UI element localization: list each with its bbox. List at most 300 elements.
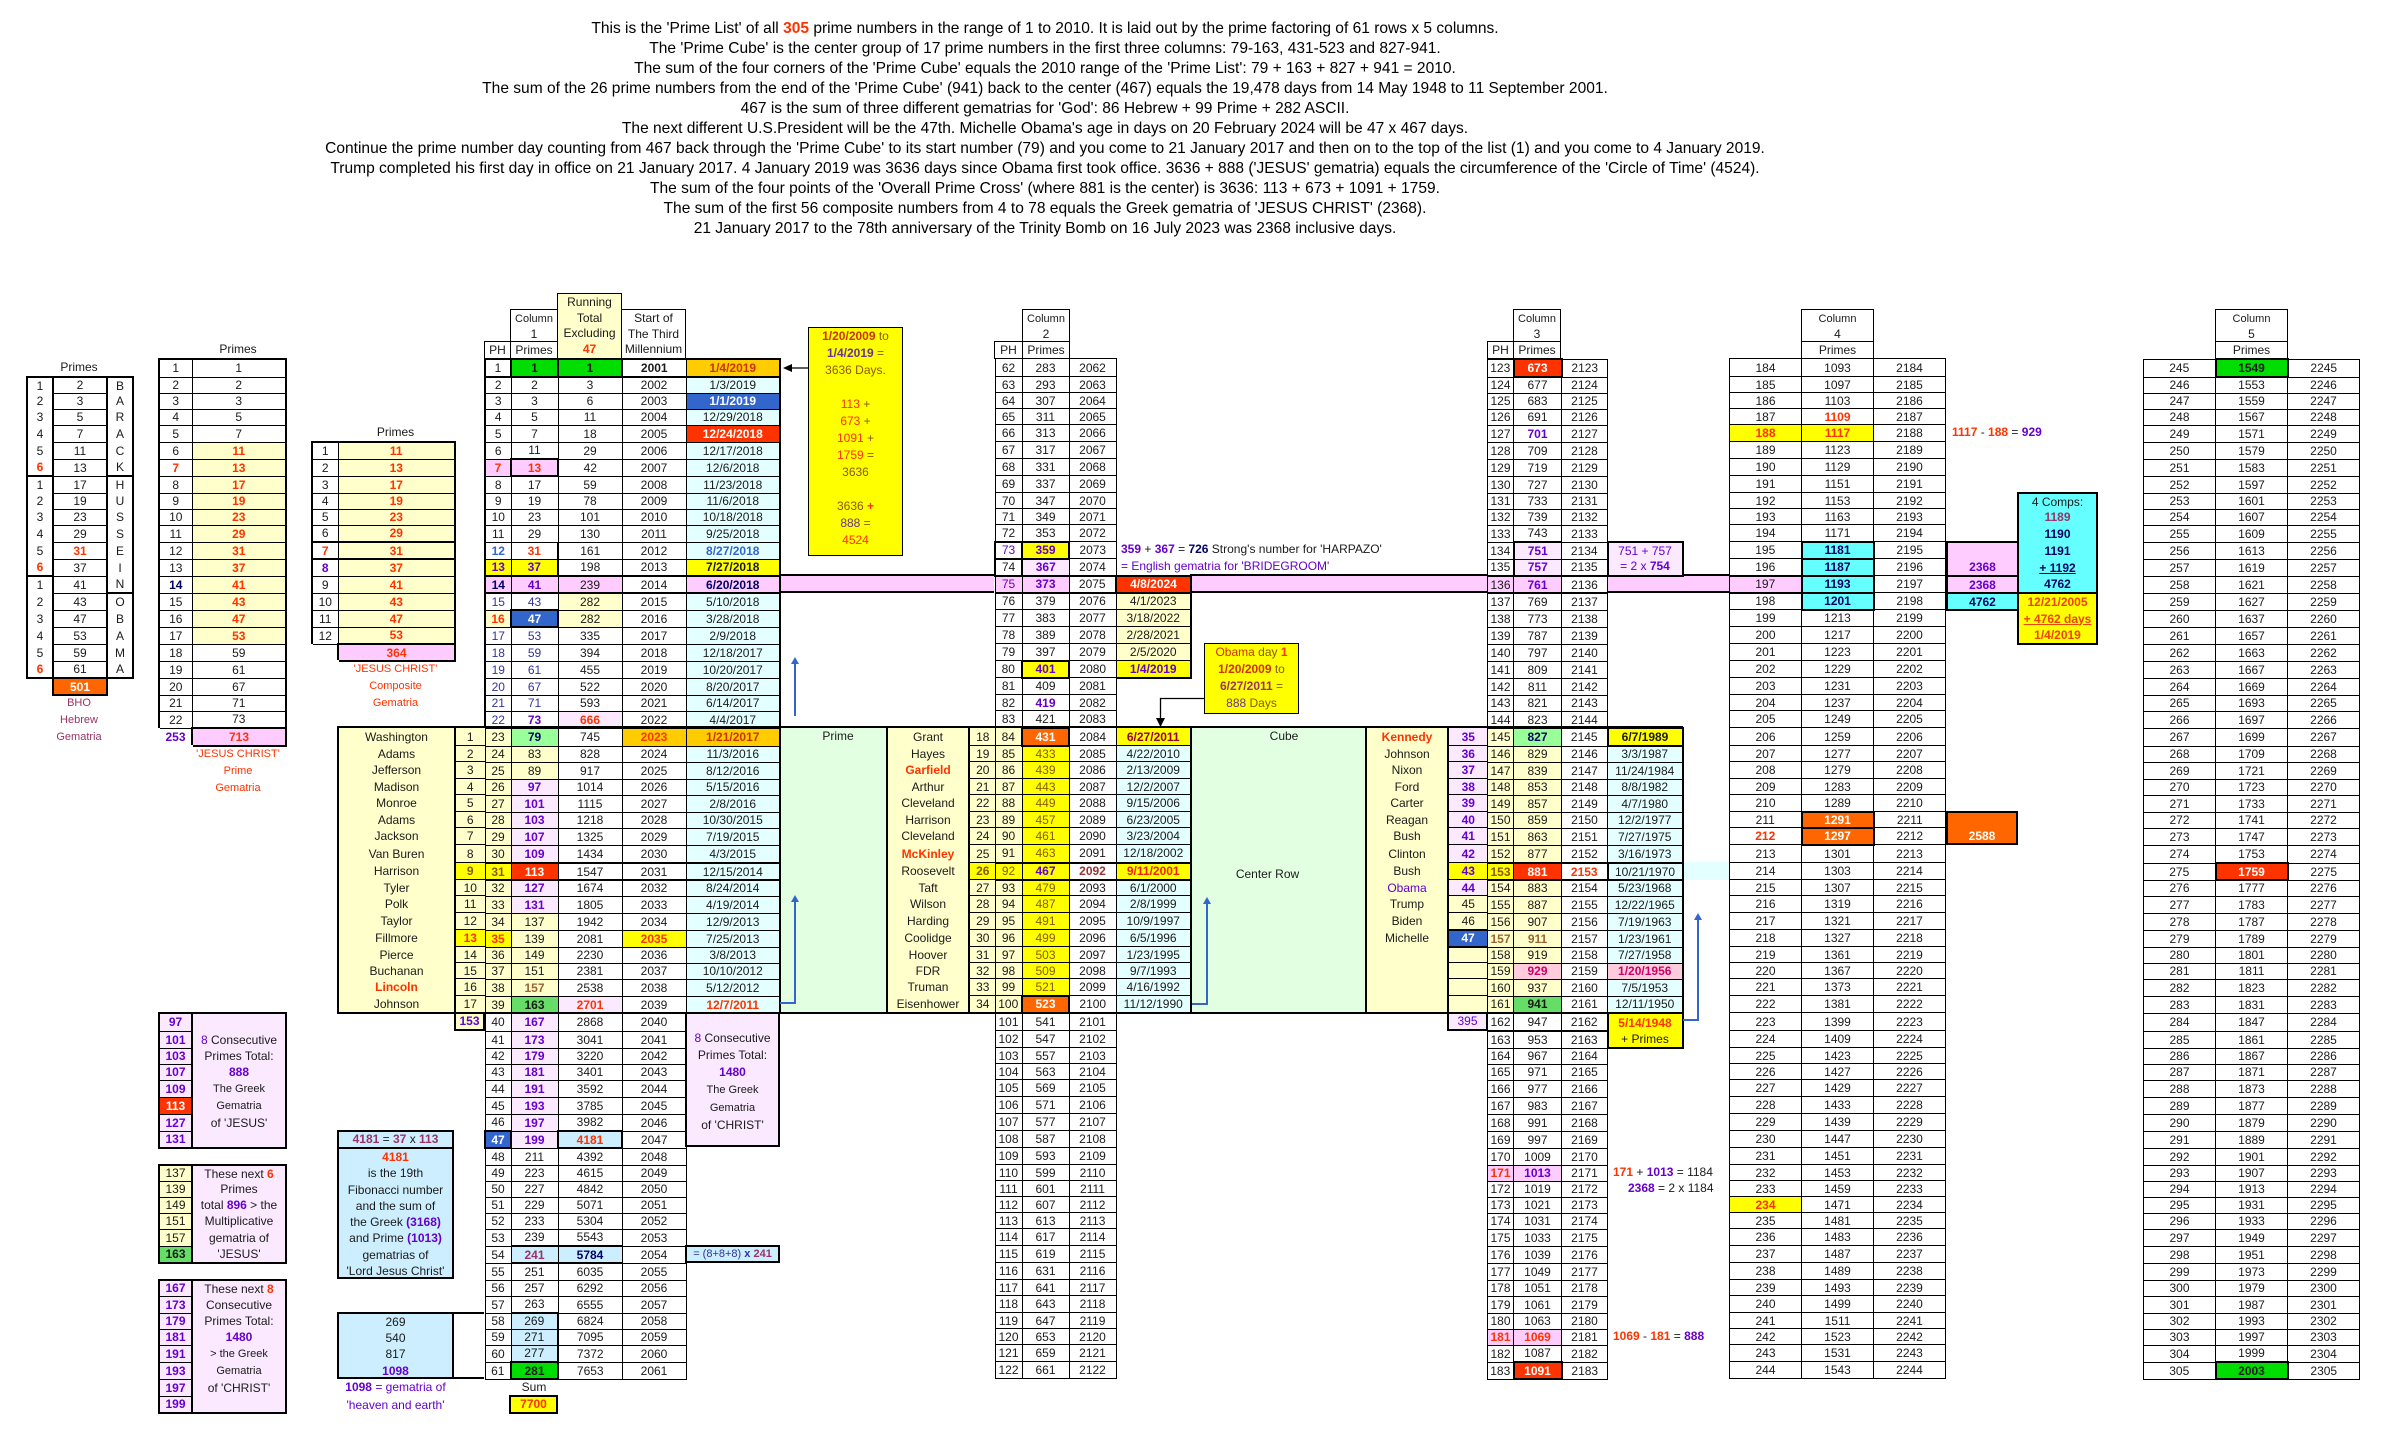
table: column 4 primes: 1499	[1824, 1297, 1851, 1311]
table: column 3 primes and dates: 7/19/1963	[1618, 914, 1671, 928]
table: column 1 primes running total and dates: 2018	[641, 646, 667, 660]
table: column 2 primes and dates: 2111	[1080, 1182, 1105, 1196]
table: column 4 primes: 227	[1755, 1081, 1776, 1095]
table: BHO letters and primes: 47	[73, 612, 87, 626]
table: column 3 primes and dates: 6/7/1989	[1622, 730, 1668, 744]
heading: primes: Primes	[377, 425, 414, 439]
header: primes: Primes	[1518, 343, 1556, 357]
arrow: down to 6/27/2011	[1156, 698, 1204, 726]
table: column 5 primes: 1867	[2238, 1049, 2265, 1063]
table: column 3 primes and dates: 2137	[1571, 595, 1598, 609]
table: column 1 primes running total and dates: 54	[491, 1248, 505, 1262]
panel: president names block 1: Madison	[374, 780, 419, 794]
table: column 4 primes: 1153	[1825, 494, 1850, 508]
table: column 4 primes: 2204	[1896, 696, 1923, 710]
table: twelve primes: 5	[322, 510, 329, 524]
table: column 3 primes and dates: 683	[1527, 394, 1548, 408]
table: column 3 primes and dates: 983	[1527, 1098, 1548, 1112]
table: column 1 primes running total and dates: 5071	[577, 1198, 603, 1212]
table: column 1 primes running total and dates: 49	[491, 1166, 505, 1180]
table: column 5 primes: 263	[2169, 662, 2190, 676]
panel: president names block 3: 41	[1462, 829, 1475, 843]
table: column 5 primes: 2278	[2310, 914, 2337, 928]
table: column 4 primes: 1427	[1824, 1064, 1851, 1078]
table: column 4 primes: 2206	[1896, 730, 1923, 744]
table: column 1 primes running total and dates: 39	[491, 998, 505, 1012]
table: column 5 primes: 2293	[2310, 1166, 2337, 1180]
table: column 2 primes and dates: 68	[1002, 460, 1015, 474]
table: column 2 primes and dates: 479	[1035, 881, 1056, 895]
table: column 3 primes and dates: 131	[1490, 494, 1511, 508]
table: column 3 primes and dates: 1019	[1524, 1182, 1551, 1196]
table: column 2 primes and dates: 2104	[1079, 1064, 1106, 1078]
panel: president names block 2: McKinley	[902, 846, 954, 860]
table: column 3 primes and dates: 1/20/1956	[1618, 964, 1671, 978]
table: column 3 primes and dates: 141	[1490, 662, 1511, 676]
table: column 5 primes: 2250	[2310, 444, 2337, 458]
panel: 4181 Fibonacci note: Fibonacci number	[348, 1183, 443, 1197]
table: column 4 primes: 232	[1755, 1166, 1776, 1180]
table: BHO letters and primes: 6	[37, 662, 43, 676]
table: column 2 primes and dates: 113	[999, 1214, 1018, 1228]
table: column 3 primes and dates: 757	[1528, 560, 1548, 574]
table: column 4 primes: 200	[1755, 628, 1776, 642]
panel: 4 composites: + 4762 days	[2024, 612, 2091, 626]
table: column 1 primes running total and dates: 8/24/2014	[706, 881, 759, 895]
table: column 2 primes and dates: 547	[1035, 1032, 1056, 1046]
table: column 1 primes running total and dates: 1/1/2019	[709, 394, 756, 408]
panel: president names block 2: 33	[976, 980, 989, 994]
table: column 4 primes: 228	[1755, 1098, 1776, 1112]
table: column 1 primes running total and dates: 233	[524, 1214, 545, 1228]
table: column 5 primes: 2267	[2310, 730, 2337, 744]
panel: president names block 3: 47	[1461, 931, 1475, 945]
table: column 1 primes running total and dates: 277	[524, 1346, 544, 1360]
table: BHO letters and primes: 61	[73, 662, 87, 676]
panel: president names block 1: 6	[467, 812, 474, 826]
table: column 4 primes: 220	[1755, 964, 1776, 978]
table: column 3 primes and dates: 138	[1490, 612, 1511, 626]
table: column 3 primes and dates: 991	[1527, 1116, 1548, 1130]
table: column 3 primes and dates: 7/27/1975	[1618, 830, 1671, 844]
table: column 5 primes: 1657	[2238, 628, 2265, 642]
title: intro text block: The sum of the 26 prime numbers from the end of the 'Prime Cube' (941) back to the center (467) equals the 19,478 days from 14 May 1948 to 11 September 2001.	[482, 80, 1608, 97]
panel: president names block 1: 14	[464, 948, 477, 962]
panel: president names block 1: 5	[467, 796, 474, 810]
table: column 4 primes: 1471	[1824, 1198, 1851, 1212]
table: column 4 primes: 1459	[1824, 1182, 1851, 1196]
table: column 2 primes and dates: 439	[1035, 763, 1056, 777]
header: PH	[1487, 341, 1514, 359]
panel: president names block 2: Taft	[918, 880, 938, 894]
table: column 2 primes and dates: 95	[1002, 914, 1015, 928]
table: BHO letters and primes: 1	[37, 478, 43, 492]
table: column 1 primes running total and dates: 7	[495, 460, 501, 474]
table: column 4 primes: 2234	[1896, 1198, 1923, 1212]
table: column 1 primes running total and dates: 130	[580, 526, 600, 540]
table: column 1 primes running total and dates: 45	[491, 1098, 505, 1112]
table: column 2 primes and dates: 93	[1002, 881, 1015, 895]
table: column 3 primes and dates: 2143	[1571, 696, 1598, 710]
table: column 2 primes and dates: 389	[1035, 628, 1056, 642]
table: first 22 primes: 1	[235, 361, 242, 375]
table: column 3 primes and dates: 677	[1527, 378, 1548, 392]
table: column 4 primes: 2237	[1896, 1247, 1923, 1261]
table: column 2 primes and dates: 6/27/2011	[1127, 730, 1180, 744]
table: column 5 primes: 1847	[2238, 1015, 2265, 1029]
table: column 3 primes and dates: 156	[1490, 914, 1511, 928]
table: column 1 primes running total and dates: 31	[528, 544, 541, 558]
table: column 2 primes and dates: 2/8/1999	[1130, 897, 1177, 911]
table: column 3 primes and dates: 161	[1490, 997, 1511, 1011]
table: column 5 primes: 302	[2169, 1314, 2190, 1328]
panel: president names block 3: 37	[1462, 763, 1475, 777]
caption: Jesus Christ composite gematria	[354, 663, 437, 709]
table: column 4 primes: 2186	[1896, 394, 1923, 408]
table: column 1 primes running total and dates: 6555	[577, 1298, 603, 1312]
table: BHO letters and primes: 5	[77, 410, 83, 424]
table: column 4 primes: 2184	[1896, 360, 1923, 374]
table: first 22 primes: 59	[232, 646, 245, 660]
table: column 1 primes running total and dates: 2381	[577, 964, 603, 978]
table: column 1 primes running total and dates: 2020	[641, 680, 667, 694]
table: column 5 primes: 301	[2169, 1298, 2190, 1312]
table: column 5 primes: 2260	[2310, 612, 2337, 626]
table: column 2 primes and dates: 433	[1035, 747, 1056, 761]
table: column 3 primes and dates: 2179	[1571, 1298, 1598, 1312]
table: column 2 primes and dates: 2122	[1079, 1363, 1106, 1377]
table: column 4 primes: 2221	[1896, 980, 1923, 994]
table: column 4 primes: 2208	[1896, 763, 1923, 777]
table: column 2 primes and dates: 293	[1035, 378, 1056, 392]
table: column 5 primes: 1709	[2238, 747, 2265, 761]
table: column 4 primes: 1423	[1824, 1048, 1851, 1062]
table: column 1 primes running total and dates: 12/18/2017	[703, 646, 763, 660]
panel: president names block 1: Monroe	[376, 796, 417, 810]
table: column 4 primes: 2214	[1896, 864, 1923, 878]
table: column 5 primes: 297	[2169, 1230, 2190, 1244]
panel: 888 consecutive primes: 8 Consecutive	[201, 1032, 277, 1046]
panel: cube block label	[1190, 727, 1365, 1012]
table: column 2 primes and dates: 2087	[1079, 780, 1106, 794]
panel: next 8 primes total 1480: 179	[165, 1314, 186, 1328]
table: column 2 primes and dates: 90	[1002, 829, 1015, 843]
table: column 3 primes and dates: 727	[1527, 478, 1548, 492]
table: column 3 primes and dates: 761	[1527, 578, 1548, 592]
table: column 2 primes and dates: 2068	[1079, 460, 1106, 474]
panel: next 8 primes total 1480: These next 8	[204, 1282, 274, 1296]
table: column 2 primes and dates: 96	[1002, 931, 1015, 945]
caption: BHO Hebrew Gematria: Hebrew	[60, 714, 98, 726]
table: column 4 primes: 2212	[1896, 829, 1923, 843]
table: column 3 primes and dates: 154	[1490, 881, 1511, 895]
table: column 1 primes running total and dates: 43	[528, 594, 541, 608]
table: column 2 primes and dates: 487	[1035, 897, 1056, 911]
caption: BHO Hebrew Gematria: Gematria	[56, 731, 102, 743]
table: column 1 primes running total and dates: 13	[528, 460, 541, 474]
table: column 4 primes: 1381	[1824, 997, 1851, 1011]
table: column 5 primes: 1913	[2238, 1182, 2265, 1196]
table: column 1 primes running total and dates: 4842	[577, 1182, 603, 1196]
table: column 1 primes running total and dates: 3	[531, 394, 538, 408]
table: column 1 primes running total and dates: 131	[524, 898, 545, 912]
table: column 3 primes and dates: 719	[1527, 460, 1548, 474]
table: column 4 primes: 187	[1755, 410, 1776, 424]
panel: president names block 1: 2	[467, 746, 474, 760]
table: column 1 primes running total and dates: 2/9/2018	[709, 628, 756, 642]
table: column 4 primes: 2210	[1896, 796, 1923, 810]
table: column 4 primes: 226	[1755, 1064, 1776, 1078]
table: column 2 primes and dates: 4/22/2010	[1127, 746, 1180, 760]
table: column 3 primes and dates: 877	[1527, 847, 1548, 861]
table: column 4 primes: 1367	[1824, 964, 1851, 978]
total: 7700	[509, 1395, 558, 1414]
table: column 1 primes running total and dates: 1/3/2019	[709, 378, 756, 392]
table: column 4 primes: 240	[1755, 1297, 1776, 1311]
table: column 2 primes and dates: 457	[1035, 812, 1056, 826]
table: column 5 primes: 2248	[2310, 410, 2337, 424]
table: column 5 primes: 1861	[2238, 1032, 2265, 1046]
table: column 3 primes and dates: 173	[1490, 1198, 1511, 1212]
table: column 3 primes and dates: 125	[1490, 394, 1511, 408]
table: column 5 primes: 266	[2169, 712, 2190, 726]
table: column 1 primes running total and dates: 7653	[577, 1364, 604, 1378]
table: column 2 primes and dates: 2114	[1080, 1230, 1105, 1244]
table: column 1 primes running total and dates: 7	[531, 426, 538, 440]
table: column 2 primes and dates: 2101	[1079, 1014, 1106, 1028]
table: column 5 primes: 2289	[2310, 1098, 2337, 1112]
table: column 2 primes and dates: 2119	[1080, 1314, 1105, 1328]
table: twelve primes: 364	[386, 646, 407, 660]
table: BHO letters and primes: 2	[37, 594, 43, 608]
table: column 4 primes: 2202	[1896, 662, 1923, 676]
table: column 3 primes and dates: 5/14/1948	[1618, 1016, 1672, 1030]
table: column 5 primes: 1901	[2238, 1150, 2265, 1164]
table: column 2 primes and dates: 587	[1035, 1132, 1056, 1146]
table: column 1 primes running total and dates: 42	[491, 1049, 505, 1063]
table: column 1 primes running total and dates: 211	[525, 1150, 544, 1164]
caption: Jesus Christ prime gematria: 'JESUS CHRIST'	[196, 748, 280, 760]
table: column 2 primes and dates: 110	[999, 1166, 1018, 1180]
header: primes	[2215, 341, 2288, 359]
table: column 5 primes: 1753	[2238, 847, 2265, 861]
table: column 5 primes: 2284	[2310, 1015, 2337, 1029]
table: column 2 primes and dates: 77	[1002, 611, 1015, 625]
table: column 1 primes running total and dates: 51	[491, 1198, 505, 1212]
panel: president names block 3: Carter	[1390, 796, 1424, 810]
panel: next 6 primes total 896: 157	[165, 1230, 186, 1244]
table: column 5 primes: 1733	[2238, 796, 2265, 810]
table: column 5 primes: 270	[2169, 780, 2190, 794]
table: first 22 primes: 2	[235, 378, 242, 392]
table: column 3 primes and dates: 134	[1490, 544, 1510, 558]
table: column 4 primes: 194	[1755, 526, 1776, 540]
table: column 1 primes running total and dates: 2044	[641, 1082, 667, 1096]
table: column 5 primes: 2266	[2310, 712, 2337, 726]
header: PH	[994, 341, 1023, 359]
table: column 4 primes: 1303	[1824, 864, 1851, 878]
table: column 5 primes: 1933	[2238, 1214, 2265, 1228]
table: column 3 primes and dates: 4/7/1980	[1621, 796, 1668, 810]
header: column 5	[2215, 309, 2288, 342]
table: column 4 primes: 2235	[1896, 1214, 1923, 1228]
table: column 1 primes running total and dates: 3/28/2018	[706, 612, 759, 626]
panel: 4 composites: 1/4/2019	[2034, 628, 2081, 642]
table: column 2 primes and dates: 65	[1002, 410, 1015, 424]
table: column 5 primes: 298	[2169, 1248, 2190, 1262]
table: column 5 primes: 2296	[2310, 1214, 2337, 1228]
table: BHO letters and primes: 501	[70, 680, 90, 694]
table: column 3 primes and dates: 857	[1527, 796, 1548, 810]
table: column 3 primes and dates: 2139	[1571, 628, 1598, 642]
table: column 3 primes and dates: 12/22/1965	[1615, 898, 1675, 912]
table: column 2 primes and dates: 619	[1035, 1247, 1056, 1261]
table: column 3 primes and dates: 701	[1527, 426, 1548, 440]
table: column 1 primes running total and dates: 2/8/2016	[709, 796, 756, 810]
table: column 1 primes running total and dates: 26	[491, 780, 505, 794]
table: column 5 primes: 254	[2169, 510, 2190, 524]
table: column 5 primes: 288	[2169, 1082, 2190, 1096]
background: pink row band left section	[779, 574, 994, 593]
table: column 2 primes and dates: 2115	[1080, 1247, 1105, 1261]
table: column 4 primes: 2213	[1896, 846, 1923, 860]
table: column 3 primes and dates: 1009	[1524, 1150, 1551, 1164]
table: column 2 primes and dates: 2107	[1079, 1115, 1106, 1129]
note: 171 + 1013: 2368 = 2 x 1184	[1628, 1181, 1714, 1195]
table: column 4 primes: 2231	[1896, 1149, 1923, 1163]
caption: 1098 gematria of heaven and earth: 'heaven and earth'	[346, 1398, 444, 1412]
table: column 3 primes and dates: 947	[1527, 1015, 1548, 1029]
table: column 4 primes: 1481	[1824, 1214, 1851, 1228]
table: column 4 primes: 1171	[1825, 526, 1850, 540]
table: column 4 primes: 2239	[1896, 1280, 1923, 1294]
table: column 4 primes: 203	[1755, 679, 1776, 693]
label: cube: Cube	[1270, 729, 1298, 743]
table: first 22 primes: 20	[169, 680, 182, 694]
table: column 1 primes running total and dates: 10	[492, 510, 505, 524]
panel: president names block 2: 34	[976, 997, 989, 1011]
panel: president names block 1: Taylor	[380, 914, 412, 928]
table: column 2 primes and dates: 409	[1035, 679, 1056, 693]
table: column 4 primes: 1327	[1824, 931, 1851, 945]
panel: president names block 3: 36	[1462, 746, 1475, 760]
table: column 4 primes: 2229	[1896, 1115, 1923, 1129]
table: column 5 primes: 1993	[2238, 1314, 2265, 1328]
table: first 22 primes: 3	[172, 394, 179, 408]
table: column 1 primes running total and dates: 745	[580, 730, 600, 744]
table: column 2 primes and dates: 2066	[1079, 426, 1106, 440]
table: column 2 primes and dates: 401	[1035, 662, 1056, 676]
table: column 3 primes and dates: 155	[1490, 898, 1511, 912]
panel: next 8 primes total 1480: > the Greek	[210, 1348, 268, 1360]
table: column 2 primes and dates: 383	[1035, 611, 1056, 625]
panel: 269 running totals: 1098	[382, 1364, 409, 1378]
table: first 22 primes: 31	[232, 544, 245, 558]
table: column 1 primes running total and dates: 2009	[641, 494, 667, 508]
table: column 3 primes and dates: 673	[1527, 361, 1548, 375]
table: column 3 primes and dates: 953	[1527, 1033, 1548, 1047]
table: column 4 primes: 1307	[1824, 880, 1851, 894]
table: column 1 primes running total and dates: 2021	[641, 696, 667, 710]
caption: BHO Hebrew Gematria: BHO	[67, 697, 91, 709]
note: 171 + 1013	[1613, 1165, 1714, 1195]
table: first 22 primes: 41	[232, 578, 245, 592]
table: column 2 primes and dates: 421	[1035, 712, 1056, 726]
table: column 2 primes and dates: 9/11/2001	[1127, 864, 1180, 878]
table: column 1 primes running total and dates: 4615	[577, 1166, 603, 1180]
panel: president names block 1: 4	[467, 780, 474, 794]
panel: 8 consecutive primes total 1480: The Greek	[707, 1084, 758, 1096]
table: column 3 primes and dates: 2132	[1571, 510, 1598, 524]
table: column 1 primes running total and dates: 2058	[641, 1314, 667, 1328]
table: BHO letters and primes: 6	[37, 460, 43, 474]
table: BHO letters and primes: 37	[73, 560, 87, 574]
table: column 2 primes and dates: 104	[998, 1064, 1019, 1078]
table: column 2 primes and dates: 2117	[1080, 1280, 1105, 1294]
table: twelve primes: 11	[319, 612, 331, 626]
panel: president names block 1: Washington	[365, 730, 428, 744]
table: column 4 primes: 231	[1755, 1149, 1776, 1163]
table: column 4 primes: 241	[1755, 1314, 1776, 1328]
table: column 3 primes and dates: 158	[1490, 948, 1511, 962]
table: BHO letters and primes: 3	[77, 394, 83, 408]
table: column 2 primes and dates: 2/28/2021	[1127, 628, 1180, 642]
table: column 3 primes and dates: 2151	[1571, 830, 1598, 844]
table: column 5 primes: 1627	[2238, 594, 2265, 608]
table: twelve primes: 3	[322, 478, 329, 492]
callout: 3636 days note: 1/4/2019 =	[827, 346, 884, 360]
panel: next 8 primes total 1480: 173	[165, 1298, 186, 1312]
table: column 2 primes and dates: 353	[1035, 526, 1056, 540]
table: column 3 primes and dates: 2182	[1571, 1346, 1598, 1360]
table: column 3 primes and dates: 797	[1527, 646, 1548, 660]
callout: 3636 days note: 1091 +	[837, 431, 874, 445]
table: column 5 primes: 1789	[2238, 932, 2265, 946]
table: column 3 primes and dates: 743	[1527, 526, 1548, 540]
table: column 2 primes and dates: 69	[1002, 477, 1015, 491]
panel: 4181 Fibonacci note: and the sum of	[356, 1199, 435, 1213]
table: column 3 primes and dates: 773	[1527, 612, 1548, 626]
table: column 3 primes and dates: 887	[1527, 898, 1548, 912]
table: column 3 primes and dates: 11/24/1984	[1615, 764, 1674, 778]
table: column 2 primes and dates: 317	[1035, 443, 1056, 457]
table: column 5 primes: 303	[2169, 1330, 2190, 1344]
table: column 5 primes: 1741	[2238, 813, 2265, 827]
panel: next 8 primes total 1480: 199	[165, 1397, 186, 1411]
table: column 1 primes running total and dates: 41	[491, 1032, 505, 1046]
table: column 5 primes: 2269	[2310, 764, 2337, 778]
table: column 2 primes and dates: 2063	[1079, 378, 1106, 392]
table: column 2 primes and dates: 75	[1002, 577, 1015, 591]
table: column 4 primes: 238	[1755, 1264, 1776, 1278]
table: column 3 primes and dates: 2165	[1571, 1065, 1598, 1079]
header: running total: Total	[577, 311, 602, 325]
table: column 1 primes running total and dates: 4181	[577, 1132, 603, 1146]
table: column 1 primes running total and dates: 56	[491, 1281, 505, 1295]
table: column 2 primes and dates: 119	[999, 1314, 1018, 1328]
table: column 3 primes and dates: 2154	[1571, 881, 1598, 895]
table: column 4 primes: 2236	[1896, 1230, 1923, 1244]
panel: next 6 primes total 896: 163	[165, 1247, 186, 1261]
table: column 5 primes: 1949	[2238, 1230, 2265, 1244]
table: column 2 primes and dates: 97	[1002, 948, 1015, 962]
table: column 5 primes: 296	[2169, 1214, 2190, 1228]
table: column 1 primes running total and dates: 20	[492, 680, 505, 694]
table: column 4 primes: 2223	[1896, 1014, 1923, 1028]
table: column 5 primes: 299	[2169, 1264, 2190, 1278]
table: BHO letters and primes: 1	[37, 578, 43, 592]
table: column 5 primes: 2003	[2238, 1364, 2265, 1378]
